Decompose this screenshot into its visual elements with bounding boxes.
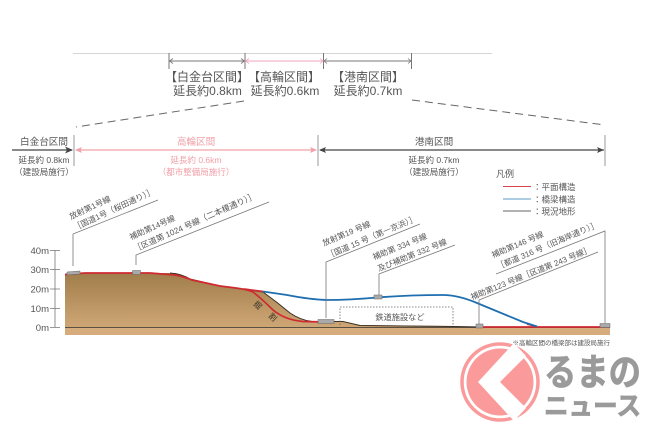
top label: Takanawa: 【高輪区間】: [248, 70, 320, 84]
top label: Konan: [332, 69, 404, 98]
callout: Auxiliary 14: ［区道第 1024 号線（二本榎通り）］: [132, 190, 258, 254]
callout: Route 1: 放射第1号線: [68, 193, 112, 221]
callout: Route 19: ［国道 15 号（第一京浜）］: [325, 213, 418, 260]
section label: Konan: （建設局施行）: [404, 167, 464, 177]
top label: Shirokanedai: 延長約0.8km: [173, 83, 242, 98]
section arrows: [12, 135, 605, 166]
section label: Konan: [404, 136, 464, 177]
section label: Takanawa: （都市整備局施行）: [158, 167, 234, 177]
section label: Shirokanedai: 延長約 0.8km: [18, 155, 70, 165]
section label: Shirokanedai: 白金台区間: [20, 136, 68, 148]
callout: Auxiliary 334 and 332: 及び補助第 332 号線: [376, 236, 448, 273]
elevation axis: 30m: [31, 265, 49, 276]
callout: Auxiliary 334 and 332: 補助第 334 号線: [371, 231, 428, 262]
road markers: [67, 270, 610, 328]
callout: Auxiliary 123: 補助第123 号線［区道第 243 号線］: [469, 244, 593, 302]
cut label: [252, 299, 279, 323]
callout: Auxiliary 146: [490, 219, 605, 323]
section label: Konan: 港南区間: [415, 136, 453, 148]
section label: Shirokanedai: （建設局施行）: [14, 167, 74, 177]
top label: Takanawa: 延長約0.6km: [251, 83, 319, 98]
watermark logo: [462, 343, 641, 421]
elevation axis: [31, 246, 60, 334]
elevation axis: 0m: [36, 323, 49, 334]
top label: Shirokanedai: 【白金台区間】: [165, 69, 249, 84]
section label: Takanawa: 延長約 0.6km: [170, 155, 222, 165]
callout: Route 1: ［国道1号（桜田通り）］: [72, 186, 156, 232]
callout: Route 19: 放射第19 号線: [321, 219, 372, 248]
section label: Konan: 延長約 0.7km: [408, 155, 460, 165]
road alignment: planar structure: [65, 273, 610, 327]
watermark logo: ニュース: [544, 391, 641, 421]
callout: Auxiliary 146: 補助第146 号線: [490, 229, 545, 260]
footnote: ※高輪区間の橋梁部は建設局施行: [512, 338, 610, 347]
cut label: 割: [267, 311, 279, 323]
legend: [496, 168, 576, 216]
top label: Takanawa: [248, 70, 320, 98]
callout: Auxiliary 123: [469, 244, 598, 324]
callout: Route 1: [68, 186, 158, 266]
road alignment: bridge structure: [263, 292, 537, 326]
top label: Konan: 【港南区間】: [332, 69, 404, 84]
elevation axis: 10m: [31, 304, 49, 315]
railway facilities box: 鉄道施設など: [375, 312, 425, 322]
legend: 凡例: [496, 168, 514, 179]
callout: Auxiliary 146: ［都道 316 号（旧海岸通り）］: [495, 219, 600, 271]
terrain cross-section: [65, 273, 610, 335]
section label: Takanawa: 高輪区間: [177, 136, 215, 148]
top label: Shirokanedai: [165, 69, 249, 98]
railway facilities box: [340, 307, 453, 325]
callout: Route 19: [321, 213, 420, 318]
top label: Konan: 延長約0.7km: [334, 83, 402, 98]
section label: Takanawa: [158, 136, 234, 177]
top section overview bar: [73, 53, 492, 69]
elevation axis: 40m: [31, 246, 49, 257]
legend: ：平面構造: [533, 182, 576, 192]
callout: Auxiliary 334 and 332: [371, 231, 455, 295]
dashed zoom lines: [76, 100, 605, 127]
legend: ：橋梁構造: [533, 194, 576, 204]
elevation axis: 20m: [31, 284, 49, 296]
legend: ：現況地形: [533, 206, 576, 216]
callout: Auxiliary 14: 補助第14号線: [128, 213, 176, 242]
cut label: 掘: [252, 299, 264, 311]
section label: Shirokanedai: [14, 136, 74, 177]
